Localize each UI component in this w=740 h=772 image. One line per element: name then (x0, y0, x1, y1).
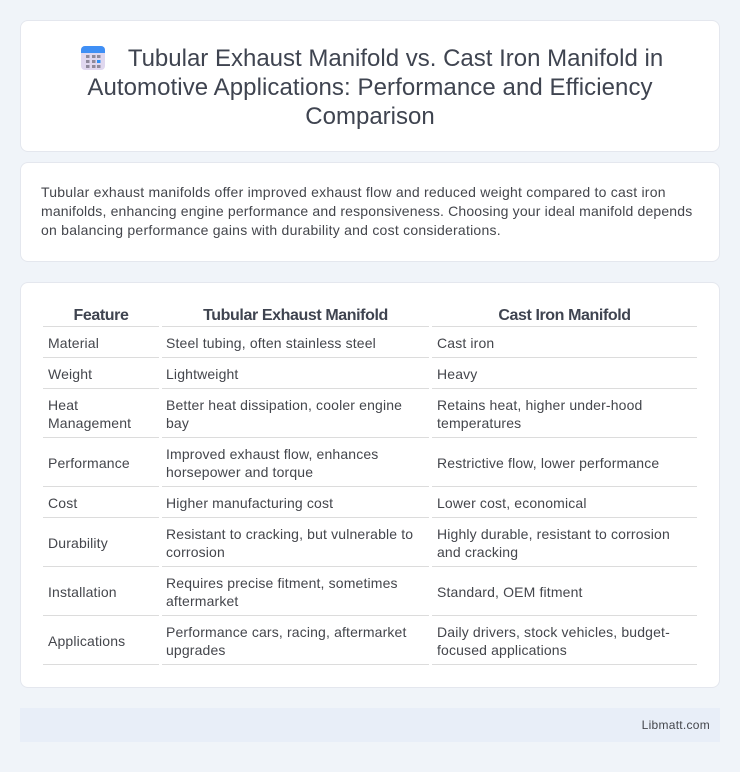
row: material (48, 335, 494, 351)
row: material: Cast iron (437, 335, 494, 351)
summary text: Tubular exhaust manifolds offer improved exhaust flow and reduced weight compared to cast iron (41, 184, 666, 200)
table header: Feature (74, 307, 128, 324)
row: weight (48, 366, 478, 382)
row: durability: Durability (48, 535, 108, 551)
title: Tubular Exhaust Manifold vs. Cast Iron Manifold in (128, 45, 663, 72)
table header: Cast Iron Manifold (498, 307, 631, 324)
row: durability: and cracking (437, 544, 518, 560)
footer credit: Libmatt.com (642, 718, 710, 732)
row: durability: corrosion (166, 544, 225, 560)
row: applications: upgrades (166, 642, 226, 658)
row: durability: Resistant to cracking, but vulnerable to (166, 526, 413, 542)
row: weight: Heavy (437, 366, 477, 382)
row: heat management (48, 397, 642, 431)
summary text (41, 184, 692, 238)
summary text: manifolds, enhancing engine performance and responsiveness. Choosing your ideal manifold depends (41, 203, 692, 219)
title: Comparison (305, 103, 435, 130)
row: applications: Applications (48, 633, 125, 649)
row: applications: Daily drivers, stock vehicles, budget- (437, 624, 670, 640)
row: performance: Improved exhaust flow, enhances (166, 446, 378, 462)
title: Automotive Applications: Performance and Efficiency (87, 74, 653, 101)
row: performance (48, 446, 659, 480)
row: weight: Lightweight (166, 366, 238, 382)
row: applications: focused applications (437, 642, 567, 658)
row: heat management: Better heat dissipation, cooler engine (166, 397, 402, 413)
footer bar (20, 708, 720, 742)
row: installation: Requires precise fitment, sometimes (166, 575, 398, 591)
row: heat management: bay (166, 415, 189, 431)
row: heat management: Retains heat, higher under-hood (437, 397, 642, 413)
row: heat management: Heat (48, 397, 78, 413)
title (87, 45, 663, 130)
comparison table (43, 326, 697, 665)
row: performance: horsepower and torque (166, 464, 313, 480)
row: cost: Higher manufacturing cost (166, 495, 333, 511)
row: performance: Restrictive flow, lower performance (437, 455, 659, 471)
summary text: on balancing performance gains with durability and cost considerations. (41, 222, 501, 238)
row: applications: Performance cars, racing, aftermarket (166, 624, 407, 640)
icon: calendar grid (81, 46, 105, 70)
panel: summary card (20, 162, 720, 262)
row: cost: Cost (48, 495, 77, 511)
row: installation: Installation (48, 584, 117, 600)
row: weight: Weight (48, 366, 92, 382)
panel: title card (20, 20, 720, 152)
row: applications (48, 624, 670, 658)
row: installation: Standard, OEM fitment (437, 584, 583, 600)
row: material: Steel tubing, often stainless steel (166, 335, 376, 351)
row: material: Material (48, 335, 99, 351)
table header: Tubular Exhaust Manifold (203, 307, 388, 324)
row: heat management: temperatures (437, 415, 521, 431)
row: heat management: Management (48, 415, 131, 431)
panel: comparison table card (20, 282, 720, 688)
row: cost: Lower cost, economical (437, 495, 587, 511)
row: cost (48, 495, 587, 511)
row: performance: Performance (48, 455, 130, 471)
table header (74, 307, 631, 324)
row: installation: aftermarket (166, 593, 238, 609)
row: installation (48, 575, 583, 609)
row: durability (48, 526, 670, 560)
row: durability: Highly durable, resistant to corrosion (437, 526, 670, 542)
